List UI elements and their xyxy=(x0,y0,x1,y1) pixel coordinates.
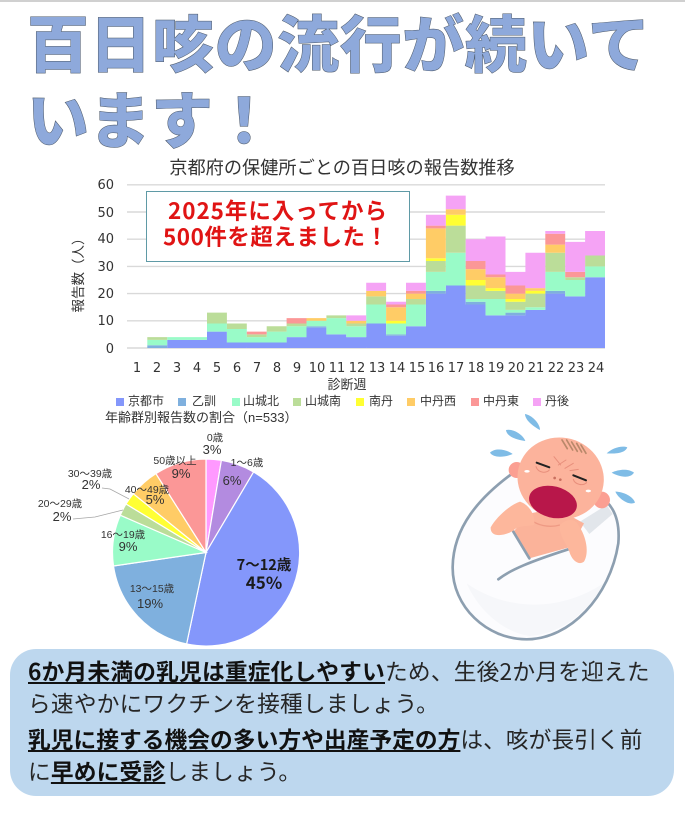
pie labels: 1～6歳 xyxy=(231,457,264,469)
swaddle xyxy=(453,474,619,639)
pie labels: 45% xyxy=(246,569,282,594)
y axis labels: 50 xyxy=(97,206,114,221)
pie labels: 9% xyxy=(172,466,191,481)
y axis labels: 0 xyxy=(106,342,114,357)
legend: 丹後 xyxy=(545,394,569,408)
pie chart title: 年齢群別報告数の割合（n=533） xyxy=(105,410,298,425)
legend: 乙訓 xyxy=(192,394,216,408)
x axis labels: 14 xyxy=(389,361,405,376)
pie labels xyxy=(38,432,292,611)
slice: 40〜49歳 xyxy=(133,474,206,552)
swaddle fold line xyxy=(498,532,568,579)
pie labels: 30～39歳 xyxy=(68,468,113,480)
swaddle inner fold xyxy=(580,505,613,534)
panel: advice text xyxy=(10,649,674,796)
x axis labels: 17 xyxy=(448,361,464,376)
stacked bar chart xyxy=(127,185,605,348)
x axis labels: 6 xyxy=(233,361,241,376)
bar chart title: 京都府の保健所ごとの百日咳の報告数推移 xyxy=(169,158,515,178)
pie labels: 6% xyxy=(223,473,242,488)
slice: 50歳以上 xyxy=(156,459,206,552)
chest xyxy=(513,508,584,558)
slice: 20〜29歳 xyxy=(120,504,206,552)
series: 南丹 xyxy=(386,215,545,324)
y axis title: 報告数（人） xyxy=(71,232,86,312)
x axis labels: 16 xyxy=(428,361,444,376)
pie labels: 13～15歳 xyxy=(130,583,175,595)
tears xyxy=(490,414,635,503)
x axis labels: 9 xyxy=(293,361,301,376)
x axis labels: 3 xyxy=(173,361,181,376)
pie labels: 7～12歳 xyxy=(237,554,292,575)
face xyxy=(536,457,587,485)
series: 丹後 xyxy=(346,196,605,321)
x axis labels: 22 xyxy=(548,361,564,376)
pie labels: 2% xyxy=(53,509,72,524)
swaddle lower shading xyxy=(467,583,603,636)
legend: 山城北 xyxy=(243,394,279,408)
legend: 中丹東 xyxy=(483,393,519,408)
pie chart xyxy=(113,459,300,646)
callout: 500件を超えました！ xyxy=(163,220,388,252)
x axis labels: 13 xyxy=(369,361,385,376)
x axis labels: 20 xyxy=(508,361,524,376)
cheek highlights xyxy=(524,470,591,492)
series: 山城南 xyxy=(147,226,605,340)
right arm xyxy=(560,520,587,563)
slice: 30〜39歳 xyxy=(126,494,206,552)
head xyxy=(508,428,613,529)
x axis labels: 19 xyxy=(488,361,504,376)
x axis title: 診断週 xyxy=(327,377,367,392)
x axis labels: 11 xyxy=(329,361,345,376)
x axis labels: 23 xyxy=(568,361,584,376)
left arm xyxy=(491,502,534,535)
mouth xyxy=(526,481,580,523)
series: 中丹東 xyxy=(247,226,585,334)
pie labels: 3% xyxy=(203,442,222,457)
y axis labels xyxy=(97,178,114,357)
title xyxy=(27,0,650,161)
advice line 4: に早めに受診しましょう。 xyxy=(28,754,301,787)
slice: 1〜6歳 xyxy=(206,460,254,552)
pie labels: 0歳 xyxy=(207,432,224,444)
nose xyxy=(553,477,562,481)
ears xyxy=(509,462,610,508)
y axis labels: 60 xyxy=(97,178,114,193)
pie labels: 19% xyxy=(137,596,163,611)
callout xyxy=(146,192,410,262)
neck crease xyxy=(533,522,560,526)
advice line 3: 乳児に接する機会の多い方や出産予定の方は、咳が長引く前 xyxy=(28,722,642,755)
pie labels: 16～19歳 xyxy=(101,529,146,541)
pie labels: 20～29歳 xyxy=(38,498,83,510)
legend: 山城南 xyxy=(305,393,341,408)
hair xyxy=(562,440,586,453)
x axis labels: 24 xyxy=(588,361,604,376)
x axis labels: 15 xyxy=(409,361,425,376)
series: 山城北 xyxy=(147,253,605,345)
x axis labels xyxy=(133,361,604,376)
x axis labels: 2 xyxy=(153,361,161,376)
x axis labels: 21 xyxy=(528,361,544,376)
slice: 13〜15歳 xyxy=(114,552,206,644)
x axis labels: 8 xyxy=(273,361,281,376)
y axis labels: 40 xyxy=(97,232,114,247)
x axis labels: 18 xyxy=(468,361,484,376)
x axis labels: 5 xyxy=(213,361,221,376)
illustration: crying baby xyxy=(453,414,635,639)
x axis labels: 1 xyxy=(133,361,141,376)
x axis labels: 7 xyxy=(253,361,261,376)
title: います！ xyxy=(27,71,275,161)
pie labels: 2% xyxy=(82,477,101,492)
legend: 南丹 xyxy=(369,393,393,408)
pie labels: 5% xyxy=(146,492,165,507)
advice line 2: ら速やかにワクチンを接種しましょう。 xyxy=(28,686,439,719)
pie labels: 40～49歳 xyxy=(125,484,170,496)
x axis labels: 12 xyxy=(349,361,365,376)
advice line 1: 6か月未満の乳児は重症化しやすいため、生後2か月を迎えた xyxy=(28,654,650,687)
callout: 2025年に入ってから xyxy=(168,194,387,226)
pie labels: 50歳以上 xyxy=(153,455,197,467)
legend: 中丹西 xyxy=(420,393,456,408)
pie labels: 9% xyxy=(119,539,138,554)
legend: 京都市 xyxy=(128,394,164,408)
y axis labels: 30 xyxy=(97,260,114,275)
y axis labels: 20 xyxy=(97,287,114,302)
slice: 7〜12歳 xyxy=(187,472,300,646)
slice: 16〜19歳 xyxy=(113,515,206,566)
series: 中丹西 xyxy=(306,209,565,324)
legend xyxy=(116,393,569,408)
y axis labels: 10 xyxy=(97,314,114,329)
top rule xyxy=(0,0,685,2)
slice: 0歳 xyxy=(206,459,221,552)
pie leader lines xyxy=(73,488,129,519)
series: 乙訓 xyxy=(147,291,565,348)
series: 京都市 xyxy=(167,277,605,348)
x axis labels: 4 xyxy=(193,361,201,376)
x axis labels: 10 xyxy=(309,361,325,376)
